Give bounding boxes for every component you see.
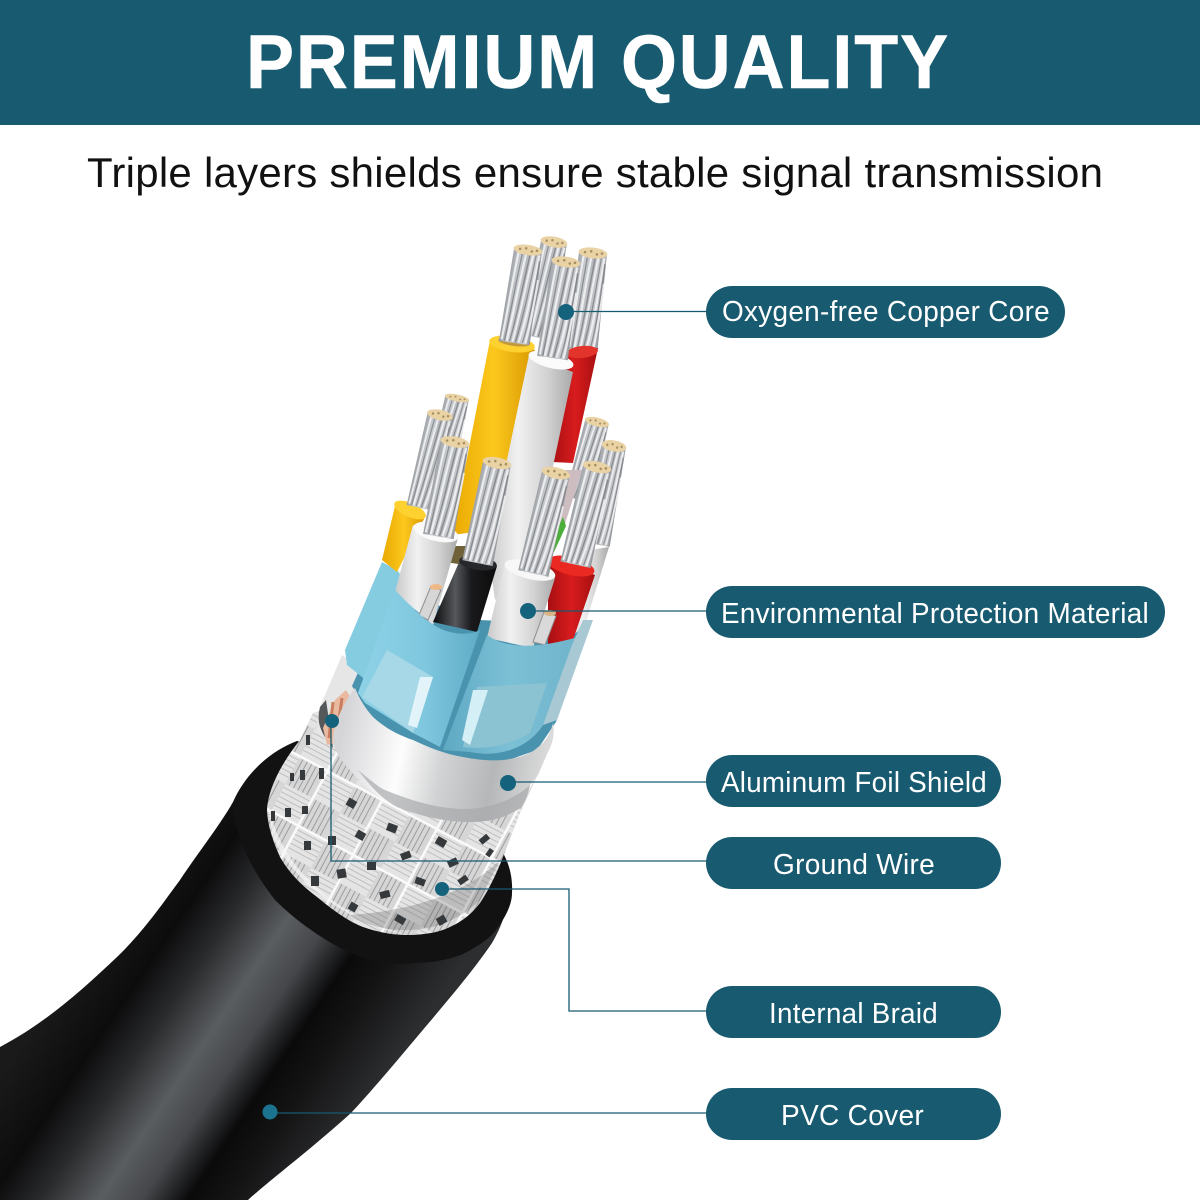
- black wire: [433, 553, 498, 632]
- white wire, front right: [487, 555, 557, 648]
- label: PVC Cover: PVC Cover: [781, 1100, 924, 1132]
- label: Internal Braid: Internal Braid: [769, 998, 938, 1030]
- yellow wire, back: [452, 333, 536, 535]
- label: Aluminum Foil Shield: Aluminum Foil Shield: [721, 767, 987, 799]
- label: Environmental Protection Material: Environmental Protection Material: [721, 598, 1149, 630]
- yellow small wire: [382, 497, 428, 572]
- subtitle: Triple layers shields ensure stable signal transmission: [87, 149, 1103, 196]
- label: PVC Cover: [706, 1088, 1001, 1140]
- blue wrap backing: [352, 590, 590, 762]
- strand over red wire: [560, 458, 613, 568]
- cable illustration: [0, 234, 628, 1200]
- back strands: [431, 234, 628, 547]
- blue wrap, left bundle: [358, 590, 480, 747]
- strand, back right: [584, 438, 628, 547]
- title: PREMIUM QUALITY: [246, 20, 950, 105]
- red wire, back: [552, 344, 599, 463]
- dark gap behind front wires: [445, 546, 470, 565]
- leader: copper core: [558, 304, 708, 320]
- label: Ground Wire: [706, 837, 1001, 889]
- strand over white left wire: [423, 434, 471, 539]
- leader: PVC cover: [262, 1104, 708, 1120]
- white wire, front left: [395, 518, 460, 625]
- PVC jacket tube: [0, 802, 506, 1200]
- leader: environmental protection: [520, 603, 708, 619]
- red wire, front: [546, 551, 596, 645]
- strand over small yellow wire: [407, 407, 455, 511]
- inner silver layer and copper ground wire: [316, 655, 372, 748]
- strand over black wire: [462, 455, 513, 566]
- back blue wrap: [345, 562, 420, 690]
- white wire, back: [488, 347, 575, 600]
- leader: internal braid: [435, 882, 708, 1011]
- aluminum foil shield: [333, 688, 554, 822]
- strand over yellow wire: [499, 243, 544, 345]
- internal braid: [267, 700, 540, 935]
- leader: ground wire: [325, 714, 708, 861]
- green wire: [548, 517, 566, 552]
- leader: foil shield: [500, 775, 708, 791]
- blue wrap, right bundle: [443, 620, 593, 754]
- strand over white wire: [537, 255, 582, 360]
- label: Oxygen-free Copper Core: [706, 286, 1065, 338]
- strand over white right wire: [518, 464, 572, 577]
- grey wire, back right: [568, 547, 609, 640]
- label: Ground Wire: Ground Wire: [773, 849, 935, 881]
- jacket end ring: [233, 741, 512, 964]
- label: Environmental Protection Material: [706, 586, 1165, 638]
- label: Internal Braid: [706, 986, 1001, 1038]
- label: Aluminum Foil Shield: [706, 755, 1001, 807]
- header banner: [0, 0, 1200, 125]
- label: Oxygen-free Copper Core: Oxygen-free Copper Core: [722, 296, 1050, 328]
